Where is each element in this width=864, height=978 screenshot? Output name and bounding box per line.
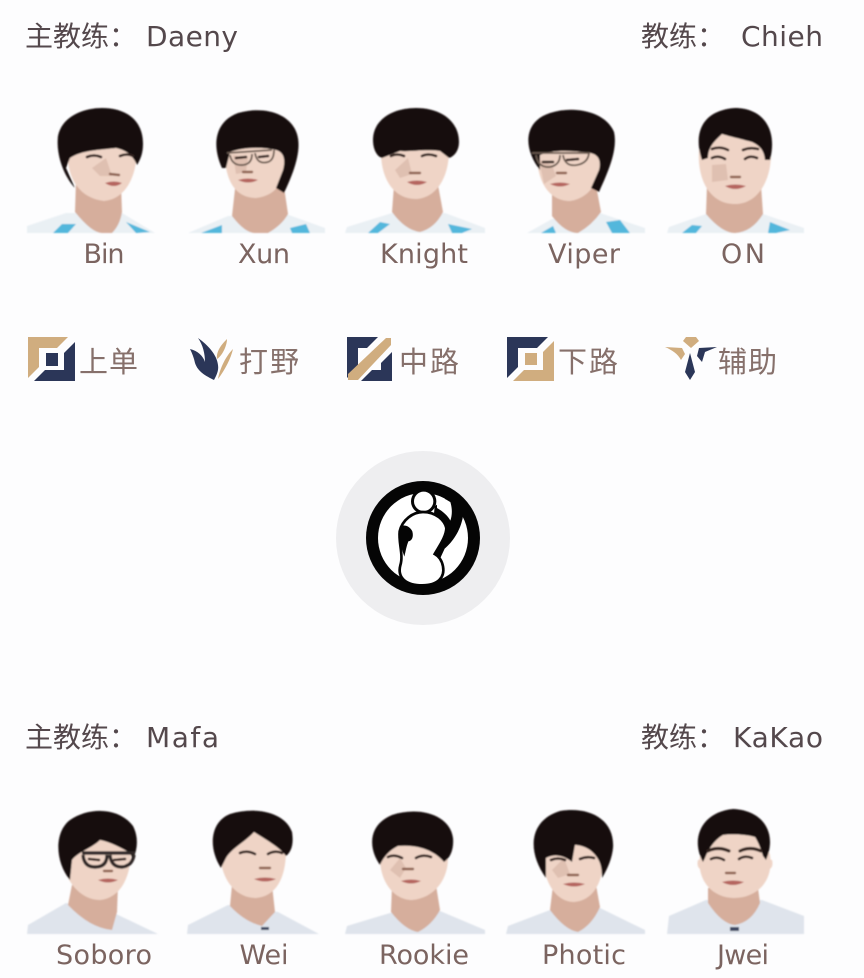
- heading: head coach Mafa: 主教练：: [25, 722, 137, 753]
- legend: bot lane: 下路: [558, 346, 618, 379]
- name: Xun: [238, 239, 290, 270]
- name: Photic: [542, 940, 626, 971]
- player: Rookie: [345, 812, 485, 971]
- heading: coach KaKao: 教练：: [641, 722, 725, 753]
- heading: head coach Mafa: [25, 721, 219, 754]
- heading: coach KaKao: [641, 721, 823, 754]
- icon: support: [665, 337, 717, 380]
- player: Knight: [345, 108, 485, 270]
- player: Jwei: [667, 809, 804, 971]
- player: Soboro: [27, 811, 158, 971]
- legend: jungle: 打野: [239, 346, 299, 379]
- player: Xun: [188, 110, 325, 270]
- heading: coach Chieh: 教练：: [641, 21, 725, 52]
- heading: head coach Mafa: Mafa: [146, 721, 219, 754]
- name: Soboro: [56, 940, 152, 971]
- player: Wei: [187, 811, 319, 971]
- name: Knight: [380, 239, 468, 270]
- name: Viper: [548, 239, 621, 270]
- icon: jungle: [190, 338, 233, 380]
- icon: top lane: [28, 337, 75, 381]
- heading: head coach Daeny: [25, 20, 238, 53]
- heading: head coach Daeny: 主教练：: [25, 21, 137, 52]
- icon: bot lane: [507, 337, 554, 381]
- name: Wei: [240, 940, 288, 971]
- legend: support: 辅助: [718, 346, 777, 379]
- name: Rookie: [379, 940, 469, 971]
- player: Photic: [506, 810, 645, 971]
- legend: mid lane: 中路: [399, 346, 459, 379]
- legend: mid lane: [347, 337, 459, 381]
- player: ON: [667, 108, 804, 270]
- heading: coach Chieh: Chieh: [741, 20, 823, 53]
- legend: top lane: [28, 337, 138, 381]
- name: Bin: [84, 239, 124, 270]
- name: Jwei: [715, 940, 769, 971]
- heading: coach KaKao: KaKao: [733, 721, 823, 754]
- legend: position icons: [28, 337, 777, 381]
- player: Bin: [27, 108, 155, 270]
- player: Viper: [527, 110, 645, 270]
- icon: team logo badge: [336, 451, 510, 625]
- heading: coach Chieh: [641, 20, 823, 53]
- legend: jungle: [190, 338, 299, 380]
- name: ON: [721, 239, 765, 270]
- icon: mid lane: [347, 337, 392, 381]
- heading: head coach Daeny: Daeny: [146, 20, 238, 53]
- legend: support: [665, 337, 777, 380]
- legend: top lane: 上单: [79, 346, 138, 379]
- legend: bot lane: [507, 337, 618, 381]
